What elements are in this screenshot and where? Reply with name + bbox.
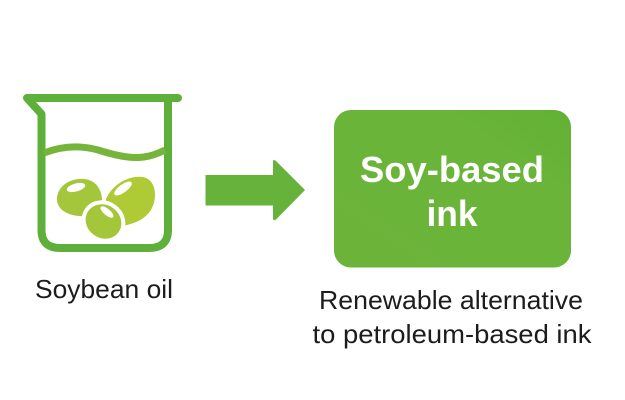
label: soybean oil: Soybean oil xyxy=(35,274,173,304)
caption: renewable alternative: Renewable alternative xyxy=(319,285,583,315)
arrow xyxy=(206,160,305,220)
icon: beaker with soybeans xyxy=(27,98,178,248)
soybean right xyxy=(106,177,155,226)
oil surface wave xyxy=(44,147,165,158)
caption: renewable alternative: to petroleum-based ink xyxy=(312,319,593,349)
panel heading: Soy-based xyxy=(360,149,544,190)
beaker outline xyxy=(27,98,178,248)
soybean front xyxy=(76,195,131,248)
panel: soy-based ink: ink xyxy=(426,193,478,234)
soybean left xyxy=(57,179,102,216)
panel: soy-based ink xyxy=(334,110,571,268)
caption: renewable alternative xyxy=(312,285,593,349)
